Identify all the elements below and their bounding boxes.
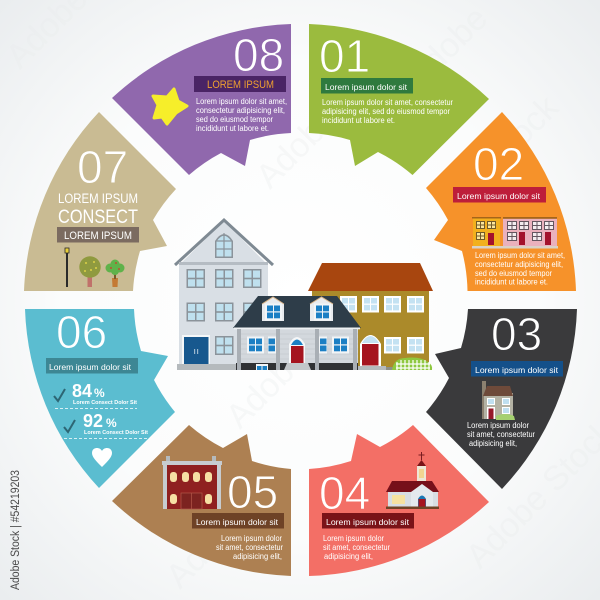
panel 05 (112, 425, 291, 576)
number 04: 04 (319, 467, 370, 519)
stat 92%: % (106, 416, 117, 430)
watermark: Adobe Stock (249, 32, 413, 196)
text 02 (475, 251, 565, 286)
panel 08 (112, 24, 291, 175)
label 05 (192, 513, 284, 528)
number 01: 01 (319, 30, 370, 82)
label 05: Lorem ipsum dolor sit (196, 517, 279, 527)
watermark: Adobe (399, 0, 495, 96)
text 04 (323, 534, 390, 561)
text 03: Lorem ipsum dolor (467, 421, 529, 430)
label 01: Lorem ipsum dolor sit (325, 82, 408, 92)
panel 03 (426, 308, 577, 489)
stat 84%: 84 (72, 381, 92, 401)
text 03 (467, 421, 535, 448)
text 01: adipisicing elit, sed do eiusmod tempor (322, 107, 450, 116)
panel 02 (426, 112, 576, 291)
icon: star (153, 89, 187, 124)
text 01: Lorem ipsum dolor sit amet, consectetur (322, 98, 453, 107)
label 08 (194, 76, 286, 92)
icon: potted plant (106, 260, 124, 287)
stat 84% (72, 381, 137, 406)
stat 92% (83, 411, 148, 436)
number 07: 07 (77, 141, 128, 193)
label 03: Lorem ipsum dolor sit (475, 365, 559, 375)
stat 92%: 92 (83, 411, 103, 431)
text 08 (196, 97, 287, 133)
panel 04 (309, 425, 489, 576)
number 02: 02 (473, 138, 524, 190)
text 05: adipisicing elit, (233, 552, 282, 561)
icon: small house (482, 381, 515, 420)
fence (392, 358, 432, 370)
icon: church (386, 452, 439, 509)
number 06: 06 (56, 306, 107, 358)
text 05 (216, 534, 283, 561)
label 07 (57, 227, 139, 242)
text 02: Lorem ipsum dolor sit amet, (475, 251, 565, 260)
icon: brick building (162, 456, 222, 509)
heading 07: LOREM IPSUM (58, 191, 138, 206)
text 05: Lorem ipsum dolor (221, 534, 282, 543)
label 03 (471, 361, 563, 376)
label 08: LOREM IPSUM (207, 79, 274, 91)
number 03: 03 (491, 308, 542, 360)
number 08: 08 (233, 29, 284, 81)
text 01: incididunt ut labore et. (322, 116, 395, 125)
house: tall grey (175, 220, 273, 370)
text 02: sed do eiusmod tempor (475, 269, 552, 278)
watermark: Adobe Stock (219, 272, 383, 436)
heading 07 (58, 191, 138, 228)
panel 07 (24, 112, 176, 291)
stat 84%: % (94, 386, 105, 400)
text 03: sit amet, consectetur (467, 430, 535, 439)
number 05: 05 (227, 466, 278, 518)
text 03: adipisicing elit, (469, 439, 517, 448)
text 08: Lorem ipsum dolor sit amet, (196, 97, 287, 106)
text 04: adipisicing elit, (324, 552, 373, 561)
icon: street lamp (65, 248, 69, 287)
label 07: LOREM IPSUM (64, 230, 132, 242)
icon: row houses (472, 217, 558, 248)
label 06: Lorem ipsum dolor sit (49, 362, 132, 372)
icon: tree (79, 256, 101, 287)
watermark: Stock (479, 88, 566, 176)
icon: heart (92, 448, 112, 467)
panel 06 (25, 306, 175, 488)
text 01 (322, 98, 453, 125)
panel 01 (309, 24, 489, 175)
label 04: Lorem ipsum dolor sit (326, 517, 410, 527)
stock id text: Adobe Stock | #54219203 (10, 470, 22, 590)
text 02: consectetur adipisicing elit, (475, 260, 563, 269)
check 84% (54, 389, 65, 401)
text 04: Lorem ipsum dolor (323, 534, 384, 543)
label 04 (322, 513, 414, 528)
watermark: Adobe (159, 499, 255, 596)
house: ochre (308, 263, 433, 370)
text 08: consectetur adipisicing elit, (196, 106, 285, 115)
text 05: sit amet, consectetur (216, 543, 283, 552)
heading 07: CONSECT (58, 207, 138, 228)
check 92% (64, 420, 75, 432)
central houses illustration (175, 220, 433, 370)
text 08: sed do eiusmod tempor (196, 115, 273, 124)
label 06 (46, 358, 138, 374)
text 04: sit amet, consectetur (323, 543, 390, 552)
stat 92%: Lorem Consect Dolor Sit (84, 430, 148, 436)
house: porch (233, 296, 361, 370)
text 08: incididunt ut labore et. (196, 124, 269, 133)
text 02: incididunt ut labore et. (475, 278, 548, 286)
stat 84%: Lorem Consect Dolor Sit (73, 400, 137, 406)
label 02 (453, 187, 546, 202)
label 01 (321, 78, 413, 94)
label 02: Lorem ipsum dolor sit (457, 191, 541, 201)
